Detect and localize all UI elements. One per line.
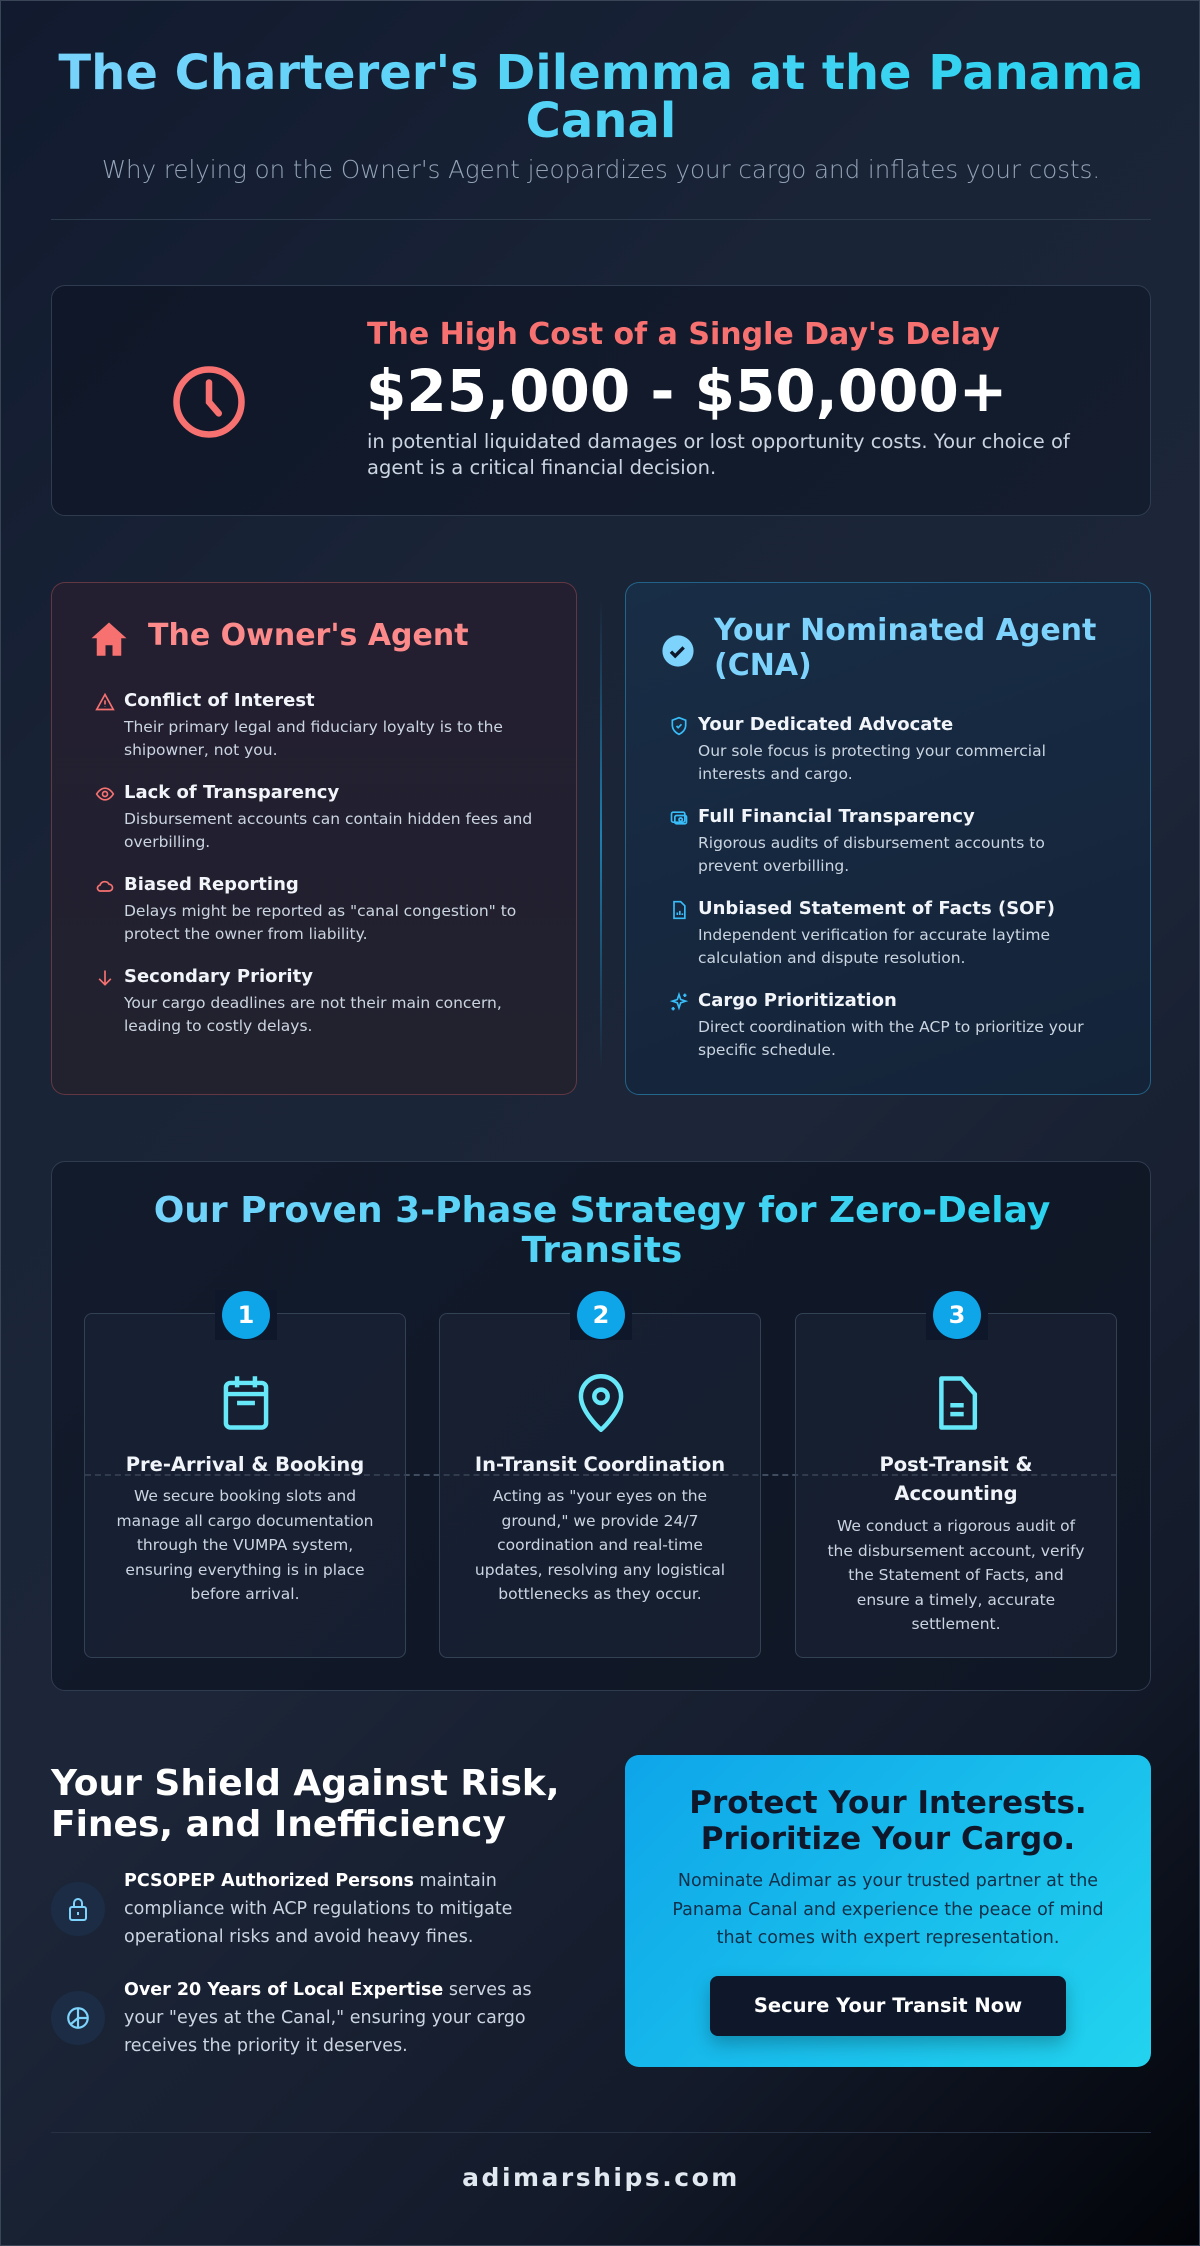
CTA heading: Prioritize Your Cargo.: [701, 1821, 1075, 1857]
icon: house: [92, 622, 126, 656]
icon: calendar: [224, 1376, 268, 1430]
CTA heading: [689, 1785, 1087, 1857]
item: PCSOPEP: PCSOPEP Authorized Persons maintain compliance with ACP regulations to mitigate operational risks and avoid heavy fines.: [124, 1871, 512, 1947]
item: financial: [670, 806, 1045, 875]
card: phase 1: [84, 1313, 406, 1658]
card: phase 1: We secure booking slots and manage all cargo documentation through the VUMPA system, ensuring everything is in place before arrival.: [116, 1487, 374, 1603]
item: expertise: Over 20 Years of Local Expertise serves as your "eyes at the Canal," ensuring your cargo receives the priority it deserves.: [124, 1980, 532, 2056]
button: [710, 1976, 1066, 2036]
item: SOF: Unbiased Statement of Facts (SOF): [698, 898, 1055, 919]
heading: shield: Your Shield Against Risk,: [51, 1763, 560, 1804]
icon: globe: [51, 1991, 105, 2045]
panel: call to action: [625, 1755, 1151, 2067]
panel: cost of delay: [51, 285, 1151, 516]
title: The Charterer's Dilemma at the Panama: [58, 45, 1144, 101]
title: [1, 49, 1200, 145]
card: phase 2: 2: [593, 1301, 609, 1329]
heading: shield: Fines, and Inefficiency: [51, 1804, 506, 1845]
item: conflict: Their primary legal and fiduciary loyalty is to the shipowner, not you.: [124, 718, 503, 759]
item: cargo: Cargo Prioritization: [698, 990, 897, 1011]
card: phase 1: Pre-Arrival & Booking: [126, 1453, 364, 1476]
heading: [52, 1191, 1152, 1271]
heading: high cost: The High Cost of a Single Day's Delay: [367, 317, 1000, 352]
item: financial: Full Financial Transparency: [698, 806, 975, 827]
item: secondary: Secondary Priority: [124, 966, 313, 987]
heading: Your Nominated Agent: [714, 613, 1096, 648]
card: phase 2: Acting as "your eyes on the ground," we provide 24/7 coordination and real-time updates, resolving any logistical bottlenecks as they occur.: [475, 1487, 725, 1603]
card: phase 1: 1: [238, 1301, 254, 1329]
item: cargo: [670, 990, 1084, 1059]
item: conflict: [95, 690, 503, 759]
item: advocate: Our sole focus is protecting your commercial interests and cargo.: [698, 742, 1046, 783]
button: Secure Your Transit Now: [754, 1994, 1022, 2017]
title: Canal: [526, 93, 676, 149]
card: phase 2: [439, 1313, 761, 1658]
icon: location pin: [578, 1374, 624, 1432]
item: biased: Delays might be reported as "canal congestion" to protect the owner from liability.: [124, 902, 516, 943]
item: biased: Biased Reporting: [124, 874, 299, 895]
icon: check: [662, 635, 694, 667]
icon: clock: [173, 366, 245, 438]
CTA heading: Protect Your Interests.: [689, 1785, 1087, 1821]
heading: The Owner's Agent: [148, 618, 469, 653]
card: phase 3: Post-Transit &: [879, 1453, 1033, 1476]
item: SOF: [673, 898, 1055, 967]
heading: Our Proven 3-Phase Strategy for Zero-Delay: [154, 1190, 1050, 1231]
card: phase 3: [795, 1313, 1117, 1658]
item: secondary: Your cargo deadlines are not their main concern, leading to costly delays.: [124, 994, 502, 1035]
card: phase 3: We conduct a rigorous audit of the disbursement account, verify the Statement of Facts, and ensure a timely, accurate settlement.: [827, 1517, 1085, 1633]
item: conflict: Conflict of Interest: [124, 690, 315, 711]
big number: $25,000 - $50,000+: [366, 357, 1007, 425]
panel: owner's agent: [51, 582, 577, 1095]
card: phase 3: Accounting: [894, 1482, 1018, 1505]
stat description: in potential liquidated damages or lost opportunity costs. Your choice of agent is a critical financial decision.: [367, 430, 1070, 479]
heading: (CNA): [714, 648, 812, 683]
item: secondary: [98, 966, 502, 1035]
card: phase 3: 3: [949, 1301, 965, 1329]
item: biased: [96, 874, 516, 943]
item: advocate: [672, 714, 1046, 783]
icon: document: [939, 1376, 978, 1430]
item: financial: Rigorous audits of disbursement accounts to prevent overbilling.: [698, 834, 1045, 875]
item: cargo: Direct coordination with the ACP to prioritize your specific schedule.: [698, 1018, 1084, 1059]
heading: Transits: [522, 1230, 682, 1271]
subtitle: Why relying on the Owner's Agent jeopardizes your cargo and inflates your costs.: [102, 155, 1100, 184]
item: transparency: Disbursement accounts can contain hidden fees and overbilling.: [124, 810, 532, 851]
panel: 3-phase strategy: [51, 1161, 1151, 1691]
footer: adimarships.com: [462, 2163, 740, 2192]
CTA text: Nominate Adimar as your trusted partner at the Panama Canal and experience the peace of mind that comes with expert representation.: [672, 1871, 1104, 1948]
item: advocate: Your Dedicated Advocate: [698, 714, 953, 735]
item: transparency: Lack of Transparency: [124, 782, 339, 803]
heading: [714, 613, 1096, 683]
item: SOF: Independent verification for accurate laytime calculation and dispute resolution.: [698, 926, 1050, 967]
item: transparency: [96, 782, 532, 851]
panel: nominated agent: [625, 582, 1151, 1095]
card: phase 2: In-Transit Coordination: [475, 1453, 725, 1476]
heading: shield: [50, 1763, 560, 1845]
icon: lock: [51, 1882, 105, 1936]
